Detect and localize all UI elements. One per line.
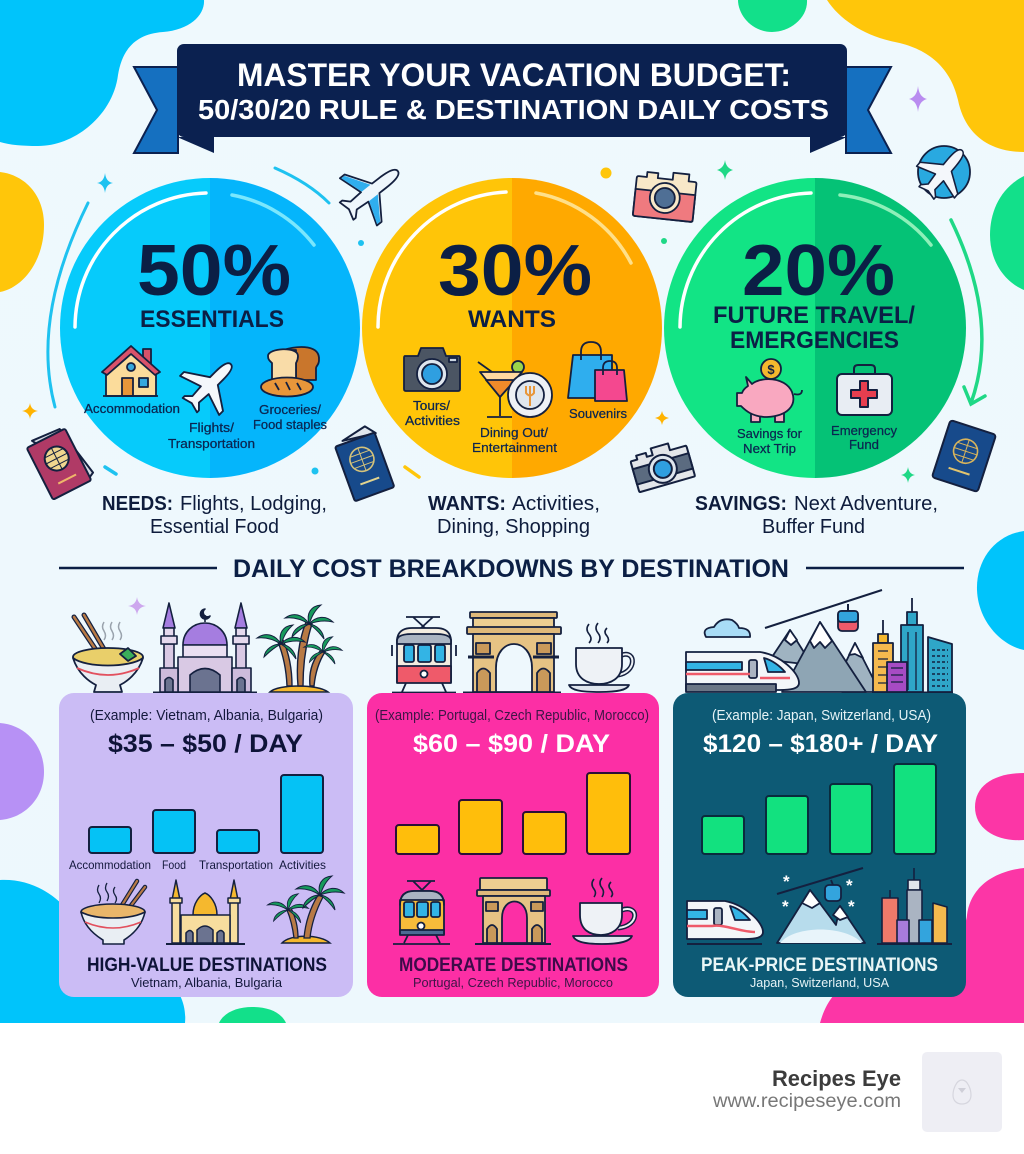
text: savings summary: Next Adventure,	[794, 493, 938, 515]
percentage 20: 20%	[742, 231, 895, 311]
text example: (Example: Vietnam, Albania, Bulgaria)	[90, 708, 323, 724]
footer url: www.recipeseye.com	[712, 1091, 901, 1112]
icon: blue passport	[332, 424, 395, 501]
bar labels	[69, 858, 326, 872]
text example: (Example: Japan, Switzerland, USA)	[712, 708, 931, 724]
heading essentials: ESSENTIALS	[140, 306, 284, 333]
icon: mountains with cable car bottom: *	[846, 876, 853, 895]
icon: skyline bottom	[877, 868, 952, 944]
text: savings summary	[695, 493, 938, 538]
icon: piggy bank	[737, 359, 802, 422]
icon: camera lower	[629, 439, 695, 492]
price: $35 – $50 / DAY	[108, 730, 303, 758]
text: savings summary: Buffer Fund	[762, 516, 865, 538]
icon: arch bottom	[475, 878, 551, 944]
text activities: Activities	[405, 413, 461, 428]
text: needs summary	[102, 493, 327, 538]
icon: house	[102, 346, 160, 396]
text flights: Flights/	[189, 420, 234, 435]
panel: 20% savings	[664, 178, 966, 478]
panel card	[59, 693, 353, 997]
text food staples: Food staples	[253, 417, 327, 432]
panel card	[367, 693, 659, 997]
text: wants summary: WANTS:	[428, 493, 506, 515]
panel: 30% wants	[362, 178, 662, 478]
percentage 50: 50%	[137, 231, 291, 311]
title line 2: 50/30/20 RULE & DESTINATION DAILY COSTS	[198, 94, 829, 125]
icon: coffee cup bottom	[573, 878, 635, 944]
text savings for: Savings for	[737, 426, 803, 441]
footer brand name: Recipes Eye	[772, 1066, 901, 1091]
text groceries: Groceries/	[259, 402, 321, 417]
bar labels: Activities	[279, 858, 326, 872]
panel: peak-price destinations	[673, 590, 966, 997]
icon: mosque bottom	[166, 880, 245, 944]
bar labels: Transportation	[199, 858, 273, 872]
heading emergencies: EMERGENCIES	[730, 327, 899, 354]
icon: cable car top	[765, 590, 882, 631]
price: $120 – $180+ / DAY	[703, 730, 938, 758]
right ribbon	[846, 67, 891, 153]
panel card	[673, 693, 966, 997]
icon: maroon passport	[25, 423, 96, 500]
panel subtitle: Japan, Switzerland, USA	[750, 975, 889, 990]
icon: globe plane	[908, 135, 981, 209]
icon: noodle bowl bottom	[81, 881, 145, 944]
text: needs summary: Essential Food	[150, 516, 279, 538]
left ribbon	[134, 67, 178, 153]
bar labels: Accommodation	[69, 858, 151, 872]
icon: piggy bank: $	[767, 362, 775, 377]
section heading: DAILY COST BREAKDOWNS BY DESTINATION	[233, 555, 789, 583]
icon: mosque top	[153, 603, 257, 692]
text entertainment: Entertainment	[472, 440, 557, 455]
text: wants summary: Dining, Shopping	[437, 516, 590, 538]
bar chart	[396, 773, 630, 854]
panel title: MODERATE DESTINATIONS	[399, 955, 628, 976]
title line 1: MASTER YOUR VACATION BUDGET:	[237, 57, 791, 93]
panel: 50% essentials	[60, 178, 360, 478]
text: wants summary: Activities,	[512, 493, 600, 515]
panel: high-value destinations	[59, 603, 353, 997]
icon: mountains with cable car bottom: *	[848, 897, 855, 916]
bar chart	[702, 764, 936, 854]
icon: cloud	[705, 619, 750, 637]
icon: mountains with cable car bottom	[777, 868, 865, 943]
icon: arch top	[463, 612, 561, 692]
icon: tram top	[392, 617, 456, 692]
icon: camera	[404, 348, 460, 391]
bar labels: Food	[162, 858, 186, 872]
icon: tram bottom	[393, 881, 450, 944]
title banner	[134, 44, 891, 153]
panel title: PEAK-PRICE DESTINATIONS	[701, 955, 938, 976]
outer decorative arrows	[48, 168, 985, 407]
text fund: Fund	[849, 437, 879, 452]
price: $60 – $90 / DAY	[413, 730, 610, 758]
icon: coffee cup top	[569, 623, 632, 692]
panel title: HIGH-VALUE DESTINATIONS	[87, 955, 327, 976]
icon: bread	[261, 347, 319, 396]
icon: martini and plate	[478, 361, 552, 417]
icon: blue passport right	[932, 420, 996, 492]
text: wants summary	[428, 493, 600, 538]
icon: train top	[686, 652, 799, 692]
banner body	[177, 44, 847, 137]
icon: palm trees bottom	[268, 876, 344, 943]
icon: mountains with cable car bottom: *	[783, 872, 790, 891]
icon: palm trees top	[257, 605, 342, 692]
text: needs summary: NEEDS:	[102, 493, 173, 515]
icon: train bottom	[687, 901, 763, 944]
ribbon fold left	[177, 137, 214, 153]
decorative sparkles and dots	[22, 86, 927, 615]
icon: first aid kit	[837, 365, 892, 415]
text dining: Dining Out/	[480, 425, 548, 440]
text tours: Tours/	[413, 398, 450, 413]
text next trip: Next Trip	[743, 441, 796, 456]
percentage 30: 30%	[438, 231, 592, 311]
text example: (Example: Portugal, Czech Republic, Morocco)	[375, 708, 649, 724]
icon: plane	[170, 345, 250, 425]
bar chart	[89, 775, 323, 853]
icon: airplane top	[328, 147, 416, 235]
text accommodation: Accommodation	[84, 401, 180, 416]
text souvenirs: Souvenirs	[569, 406, 627, 421]
icon: mountains top	[770, 622, 880, 692]
heading future travel: FUTURE TRAVEL/	[713, 302, 915, 329]
ribbon fold right	[810, 137, 847, 153]
panel subtitle: Portugal, Czech Republic, Morocco	[413, 975, 613, 990]
icon: noodle bowl top	[73, 615, 143, 692]
text: needs summary: Flights, Lodging,	[180, 493, 327, 515]
icon: shopping bags	[568, 342, 627, 401]
icon: skyline top	[872, 598, 953, 692]
text transportation: Transportation	[168, 436, 255, 451]
panel: moderate destinations	[367, 612, 659, 997]
heading wants: WANTS	[468, 306, 556, 333]
icon: camera top	[633, 169, 697, 222]
footer logo	[922, 1052, 1002, 1132]
icon: mountains with cable car bottom: *	[782, 897, 789, 916]
text emergency: Emergency	[831, 423, 898, 438]
text: savings summary: SAVINGS:	[695, 493, 787, 515]
panel subtitle: Vietnam, Albania, Bulgaria	[131, 975, 283, 990]
